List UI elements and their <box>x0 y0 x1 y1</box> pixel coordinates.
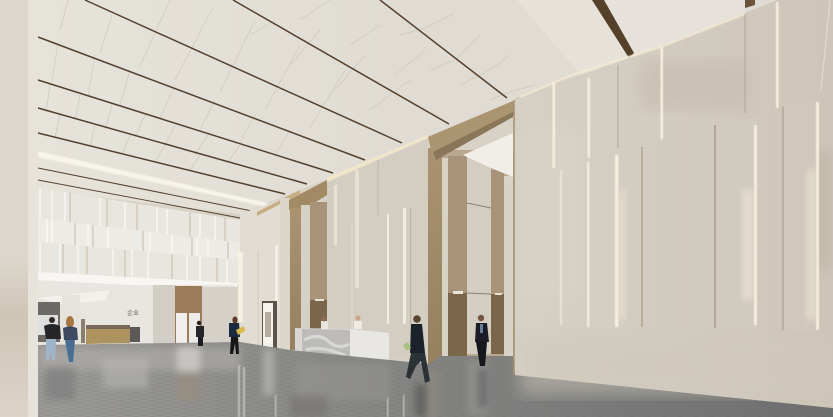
first elevator opening <box>280 180 327 350</box>
wall edge trim <box>513 100 515 375</box>
ceiling <box>38 0 780 218</box>
wooden counter <box>86 325 140 344</box>
person: man standing <box>475 315 489 366</box>
logo mark: 企业 <box>127 309 139 317</box>
upper lit strips <box>552 2 778 168</box>
far left wall between back wall and columns <box>238 190 300 350</box>
ceiling slats <box>38 0 507 218</box>
upper seams <box>618 0 830 148</box>
left foreground pillar <box>0 0 38 417</box>
central wall <box>327 135 428 363</box>
person: man with green folder walking <box>403 315 430 383</box>
bright ceiling cove <box>38 151 267 207</box>
polished floor <box>38 342 833 417</box>
lower lit panels <box>560 100 819 330</box>
people: couple walking <box>44 316 85 362</box>
right wall <box>514 0 833 408</box>
person: at the door <box>196 321 204 346</box>
back wall with white panels <box>38 188 240 300</box>
side lounge <box>38 302 60 342</box>
ceiling panel seams <box>46 0 535 170</box>
reception room behind the wall <box>38 285 235 345</box>
white soffit <box>38 272 237 290</box>
second elevator opening with gold beam <box>428 101 515 364</box>
floor reflections <box>40 346 489 417</box>
cove light along wall top <box>520 14 745 97</box>
reception desk <box>295 316 389 367</box>
wooden door <box>175 286 202 345</box>
person: woman with yellow folder <box>229 316 245 354</box>
digital sign <box>262 301 277 349</box>
receptionists <box>321 316 362 329</box>
